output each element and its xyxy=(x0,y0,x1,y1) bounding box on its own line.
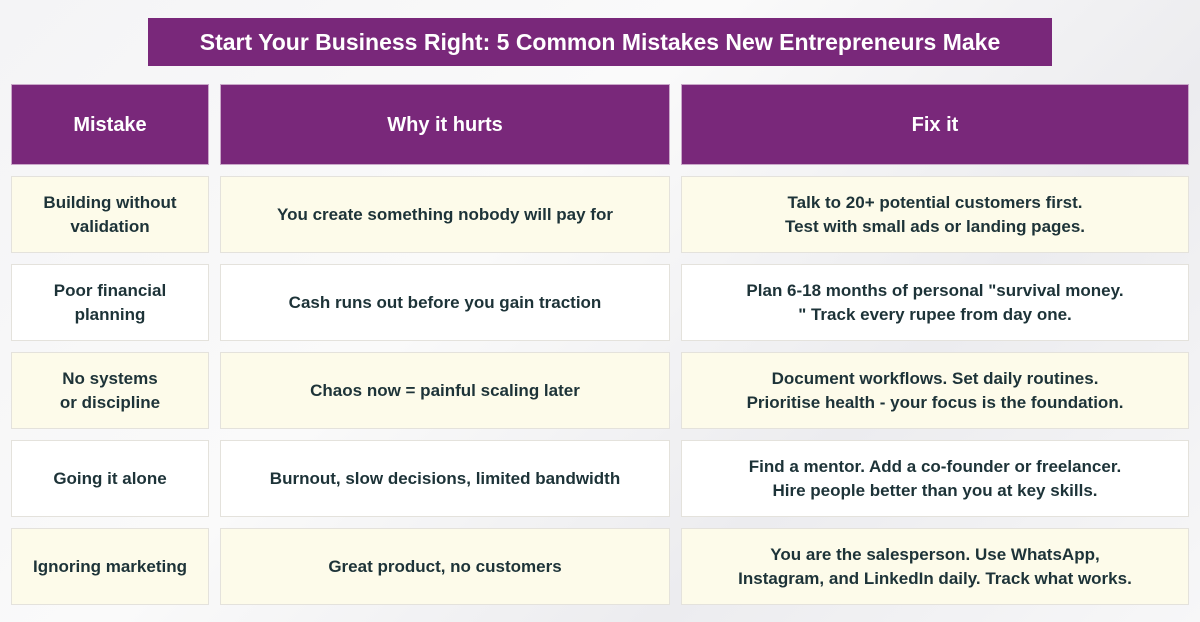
header: Fix it: Fix it xyxy=(912,114,958,136)
row 5 mistake xyxy=(11,528,209,605)
row 5 why xyxy=(220,528,670,605)
row 4 fix xyxy=(681,440,1189,517)
row 1 fix xyxy=(681,176,1189,253)
row 3 fix: Document workflows. Set daily routines. xyxy=(772,368,1098,388)
row 4 fix: Find a mentor. Add a co-founder or freelancer. xyxy=(749,456,1121,476)
row 4 mistake: Going it alone xyxy=(53,468,167,488)
row 2 fix: " Track every rupee from day one. xyxy=(798,304,1072,324)
row 2 mistake: Poor financial xyxy=(54,280,166,300)
header: Why it hurts xyxy=(220,84,670,165)
row 2 why xyxy=(220,264,670,341)
row 2 mistake: planning xyxy=(75,304,145,324)
row 4 why xyxy=(220,440,670,517)
row 3 mistake xyxy=(11,352,209,429)
row 3 mistake: No systems xyxy=(62,368,158,388)
row 1 why xyxy=(220,176,670,253)
row 5 fix xyxy=(681,528,1189,605)
row 1 mistake: validation xyxy=(70,216,150,236)
row 2 fix: Plan 6-18 months of personal "survival money. xyxy=(746,280,1124,300)
title xyxy=(148,18,1052,66)
row 5 mistake: Ignoring marketing xyxy=(33,556,187,576)
header: Why it hurts: Why it hurts xyxy=(387,114,503,136)
row 5 why: Great product, no customers xyxy=(328,556,562,576)
row 3 fix: Prioritise health - your focus is the foundation. xyxy=(747,392,1123,412)
row 4 fix: Hire people better than you at key skills. xyxy=(772,480,1098,500)
row 1 fix: Test with small ads or landing pages. xyxy=(785,216,1085,236)
header: Fix it xyxy=(681,84,1189,165)
row 4 mistake xyxy=(11,440,209,517)
row 5 fix: Instagram, and LinkedIn daily. Track what works. xyxy=(738,568,1132,588)
row 1 mistake xyxy=(11,176,209,253)
header: Mistake: Mistake xyxy=(73,114,147,136)
title: Start Your Business Right: 5 Common Mistakes New Entrepreneurs Make xyxy=(200,28,1000,54)
row 1 why: You create something nobody will pay for xyxy=(277,204,613,224)
row 3 fix xyxy=(681,352,1189,429)
row 3 why: Chaos now = painful scaling later xyxy=(310,380,580,400)
row 2 mistake xyxy=(11,264,209,341)
row 5 fix: You are the salesperson. Use WhatsApp, xyxy=(770,544,1100,564)
row 1 fix: Talk to 20+ potential customers first. xyxy=(788,192,1082,212)
row 1 mistake: Building without xyxy=(43,192,177,212)
row 2 why: Cash runs out before you gain traction xyxy=(289,292,601,312)
row 3 mistake: or discipline xyxy=(60,392,160,412)
row 2 fix xyxy=(681,264,1189,341)
row 3 why xyxy=(220,352,670,429)
row 4 why: Burnout, slow decisions, limited bandwidth xyxy=(270,468,620,488)
header: Mistake xyxy=(11,84,209,165)
